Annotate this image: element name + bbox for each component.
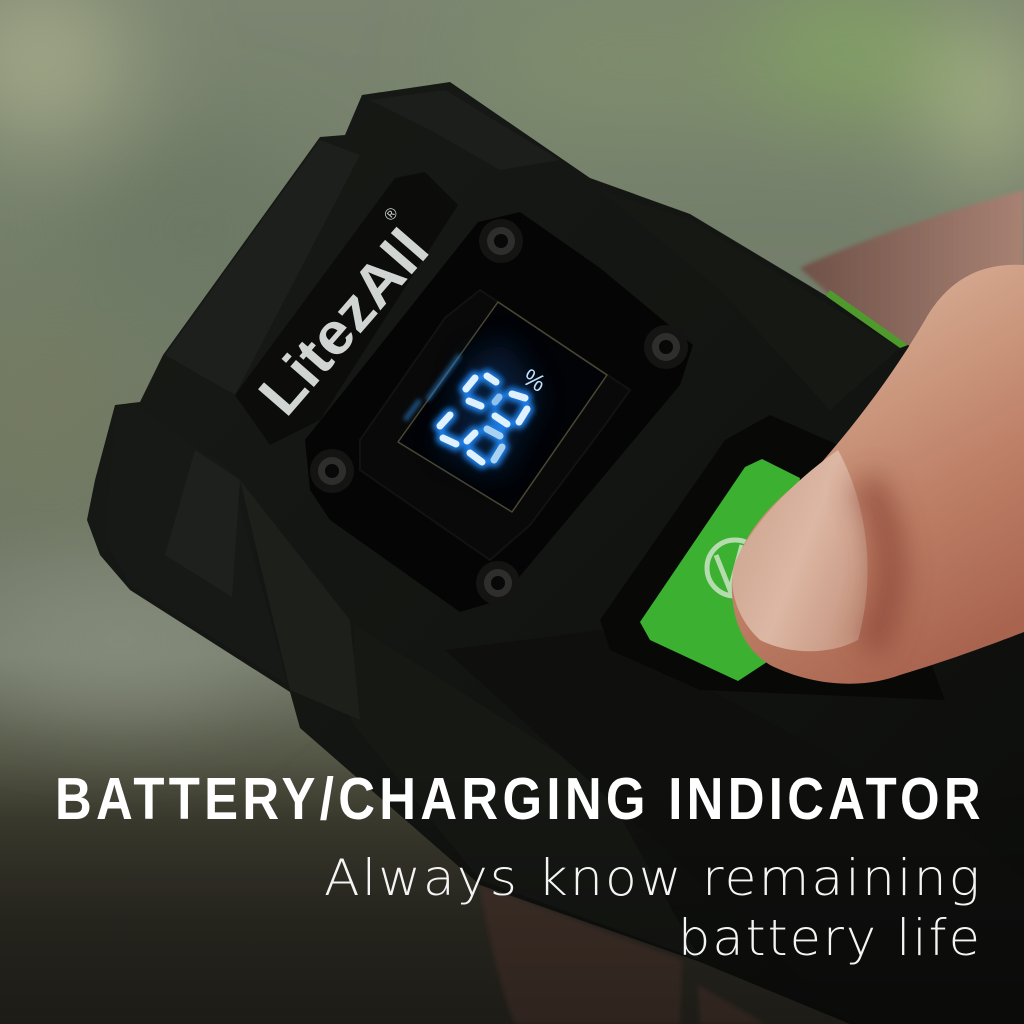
- screws: [310, 219, 688, 605]
- subtitle: Always know remaining: [324, 849, 982, 907]
- top shoulder panels: [370, 90, 560, 170]
- lcd screen: [398, 302, 607, 512]
- power button recess: [600, 415, 945, 700]
- digit segments: [440, 376, 527, 462]
- green power button: [640, 459, 800, 681]
- logo plate: [235, 172, 458, 445]
- bezel inner ledge: [360, 290, 630, 560]
- thumb: [732, 265, 1024, 684]
- fingers behind the device: [480, 190, 1024, 1024]
- thumbnail: [732, 450, 868, 651]
- percent sign: %: [518, 364, 550, 398]
- battery digits readout: [405, 340, 550, 475]
- lime edge stripe: [826, 290, 908, 348]
- logo text: ®: [381, 204, 402, 225]
- subtitle: [324, 849, 982, 967]
- subtitle: battery life: [678, 909, 982, 967]
- display bezel: [305, 212, 693, 612]
- cuticle shadow: [865, 480, 890, 650]
- logo text: LitezAll: [246, 217, 441, 428]
- lower body panels: [350, 625, 700, 960]
- left end panels: [105, 405, 288, 685]
- bottom shading behind caption: [0, 760, 1024, 1024]
- button logo: [707, 540, 763, 596]
